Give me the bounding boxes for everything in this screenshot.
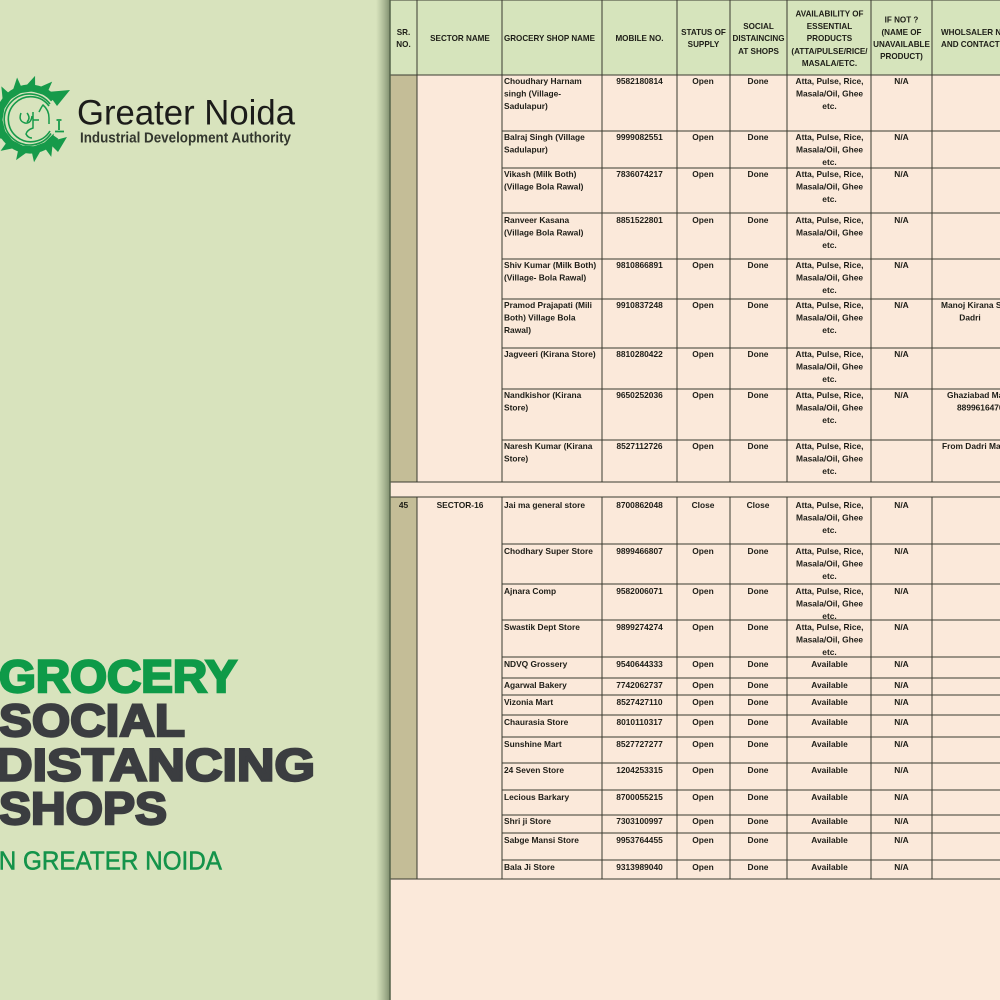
logo wordmark: Greater Noida: [77, 94, 296, 132]
availability column: etc.: [822, 240, 837, 250]
availability column: etc.: [822, 466, 837, 476]
shop names column: Both) Village Bola: [504, 312, 576, 322]
status of supply column: Open: [692, 792, 714, 802]
mobile number column: 8700862048: [616, 500, 663, 510]
heading: distancing: DISTANCING: [0, 740, 315, 790]
logo subtitle: Industrial Development Authority: [80, 130, 291, 146]
shop names column: Nandkishor (Kirana: [504, 390, 582, 400]
social distancing column: Done: [748, 132, 769, 142]
if not column: N/A: [894, 586, 909, 596]
shop names column: (Village Bola Rawal): [504, 228, 584, 238]
shop names column: Agarwal Bakery: [504, 680, 567, 690]
availability column: etc.: [822, 647, 837, 657]
if not column: N/A: [894, 76, 909, 86]
availability column: Available: [811, 659, 848, 669]
shop names column: Balraj Singh (Village: [504, 132, 585, 142]
if not column: N/A: [894, 792, 909, 802]
status of supply column: Open: [692, 862, 714, 872]
table header labels: AT SHOPS: [738, 47, 779, 56]
social distancing column: Done: [748, 169, 769, 179]
availability column: Available: [811, 717, 848, 727]
table header labels: SUPPLY: [688, 40, 720, 49]
table header labels: WHOLSALER N: [941, 28, 1000, 37]
table header labels: MOBILE NO.: [615, 34, 664, 43]
availability column: Masala/Oil, Ghee: [796, 598, 863, 608]
availability column: etc.: [822, 157, 837, 167]
shop names column: Sunshine Mart: [504, 739, 562, 749]
shop names column: Sabge Mansi Store: [504, 835, 579, 845]
if not column: N/A: [894, 132, 909, 142]
sector 16 row labels: [399, 500, 484, 510]
table header labels: SOCIAL: [743, 22, 774, 31]
social distancing column: Done: [748, 659, 769, 669]
if not column: N/A: [894, 300, 909, 310]
mobile number column: 8010110317: [616, 717, 663, 727]
logo: Greater Noida Industrial Development Authority: [0, 76, 296, 162]
icon: saw-blade C emblem: [0, 76, 70, 162]
status of supply column: Open: [692, 835, 714, 845]
mobile number column: 8527727277: [616, 739, 663, 749]
mobile number column: 9313989040: [616, 862, 663, 872]
availability column: Masala/Oil, Ghee: [796, 272, 863, 282]
table header labels: STATUS OF: [681, 28, 726, 37]
if not column: N/A: [894, 765, 909, 775]
availability column: Atta, Pulse, Rice,: [796, 546, 863, 556]
shop names column: Shiv Kumar (Milk Both): [504, 260, 596, 270]
social distancing column: Done: [748, 622, 769, 632]
availability column: Masala/Oil, Ghee: [796, 312, 863, 322]
social distancing column: Close: [747, 500, 770, 510]
shop names column: Store): [504, 402, 528, 412]
mobile number column: 9540644333: [616, 659, 663, 669]
mobile number column: 9582180814: [616, 76, 663, 86]
if not column: N/A: [894, 717, 909, 727]
social distancing column: Done: [748, 717, 769, 727]
panel shadow: [376, 0, 390, 1000]
heading: social: SOCIAL: [0, 695, 185, 746]
availability column: Atta, Pulse, Rice,: [796, 586, 863, 596]
status of supply column: Open: [692, 300, 714, 310]
status of supply column: Open: [692, 132, 714, 142]
sector 16 row labels: 45: [399, 500, 408, 510]
availability column: Masala/Oil, Ghee: [796, 512, 863, 522]
mobile number column: 9910837248: [616, 300, 663, 310]
mobile number column: 7742062737: [616, 680, 663, 690]
social distancing column: Done: [748, 390, 769, 400]
shop names column: 24 Seven Store: [504, 765, 564, 775]
status of supply column: Open: [692, 680, 714, 690]
if not column: N/A: [894, 697, 909, 707]
status of supply column: Open: [692, 349, 714, 359]
mobile number column: 7303100997: [616, 816, 663, 826]
social distancing column: Done: [748, 215, 769, 225]
availability column: Available: [811, 697, 848, 707]
mobile number column: 9953764455: [616, 835, 663, 845]
social distancing column: Done: [748, 680, 769, 690]
availability column: etc.: [822, 571, 837, 581]
table header labels: (NAME OF: [881, 28, 922, 37]
if not column: N/A: [894, 546, 909, 556]
table header labels: DISTAINCING: [732, 34, 785, 43]
if not column: N/A: [894, 622, 909, 632]
social distancing column: Done: [748, 300, 769, 310]
availability column: Masala/Oil, Ghee: [796, 362, 863, 372]
social distancing column: Done: [748, 816, 769, 826]
mobile number column: 9582006071: [616, 586, 663, 596]
social distancing column: Done: [748, 76, 769, 86]
status of supply column: Close: [692, 500, 715, 510]
status of supply column: Open: [692, 169, 714, 179]
mobile number column: 9899274274: [616, 622, 663, 632]
availability column: Masala/Oil, Ghee: [796, 144, 863, 154]
shop names column: Vizonia Mart: [504, 697, 553, 707]
availability column: etc.: [822, 325, 837, 335]
status of supply column: Open: [692, 659, 714, 669]
status of supply column: Open: [692, 390, 714, 400]
shop names column: Vikash (Milk Both): [504, 169, 577, 179]
shop names column: Bala Ji Store: [504, 862, 555, 872]
shop names column: Pramod Prajapati (Mili: [504, 300, 592, 310]
availability column: Atta, Pulse, Rice,: [796, 132, 863, 142]
availability column: etc.: [822, 415, 837, 425]
title block: [0, 651, 315, 876]
availability column: Available: [811, 835, 848, 845]
mobile number column: 9999082551: [616, 132, 663, 142]
if not column: [894, 76, 909, 872]
shop names column: Rawal): [504, 325, 531, 335]
availability column: Atta, Pulse, Rice,: [796, 76, 863, 86]
shop names column: Ajnara Comp: [504, 586, 556, 596]
shop names column: (Village Bola Rawal): [504, 182, 584, 192]
shop names column: singh (Village-: [504, 88, 561, 98]
availability column: Atta, Pulse, Rice,: [796, 622, 863, 632]
table header labels: NO.: [396, 40, 411, 49]
mobile number column: 8851522801: [616, 215, 663, 225]
serial number column fill, second block: [390, 497, 417, 879]
if not column: N/A: [894, 390, 909, 400]
availability column: Masala/Oil, Ghee: [796, 634, 863, 644]
availability column: Available: [811, 792, 848, 802]
availability column: etc.: [822, 374, 837, 384]
availability column: Atta, Pulse, Rice,: [796, 215, 863, 225]
availability column: Atta, Pulse, Rice,: [796, 349, 863, 359]
table header labels: SECTOR NAME: [430, 34, 490, 43]
table header labels: PRODUCT): [880, 52, 923, 61]
mobile number column: 8527427110: [616, 697, 663, 707]
availability column: Masala/Oil, Ghee: [796, 558, 863, 568]
shop names column: Sadulapur): [504, 101, 548, 111]
availability column: Available: [811, 816, 848, 826]
table header labels: MASALA/ETC.: [802, 59, 857, 68]
social distancing column: Done: [748, 349, 769, 359]
social distancing column: Done: [748, 765, 769, 775]
social distancing column: Done: [748, 260, 769, 270]
panel: spreadsheet table: [390, 0, 1000, 1000]
table header labels: UNAVAILABLE: [873, 40, 930, 49]
mobile number column: 7836074217: [616, 169, 663, 179]
availability column: Atta, Pulse, Rice,: [796, 390, 863, 400]
availability column: Masala/Oil, Ghee: [796, 454, 863, 464]
table header labels: GROCERY SHOP NAME: [504, 34, 596, 43]
if not column: N/A: [894, 500, 909, 510]
if not column: N/A: [894, 215, 909, 225]
shop names column: Chaurasia Store: [504, 717, 569, 727]
social distancing column: Done: [748, 441, 769, 451]
shop names column: Sadulapur): [504, 144, 548, 154]
serial number column fill: [390, 75, 417, 482]
table header labels: PRODUCTS: [807, 34, 853, 43]
availability column: Available: [811, 739, 848, 749]
status of supply column: Open: [692, 586, 714, 596]
wholesaler column: Dadri: [959, 312, 981, 322]
status of supply column: [692, 76, 715, 872]
mobile number column: 8810280422: [616, 349, 663, 359]
status of supply column: Open: [692, 441, 714, 451]
mobile number column: 8527112726: [616, 441, 663, 451]
shop names column: Store): [504, 454, 528, 464]
shop names column: NDVQ Grossery: [504, 659, 568, 669]
mobile number column: 1204253315: [616, 765, 663, 775]
if not column: N/A: [894, 862, 909, 872]
status of supply column: Open: [692, 622, 714, 632]
status of supply column: Open: [692, 739, 714, 749]
table header background: [390, 0, 1000, 75]
availability column: [796, 76, 863, 872]
availability column: Masala/Oil, Ghee: [796, 228, 863, 238]
status of supply column: Open: [692, 215, 714, 225]
mobile number column: 9899466807: [616, 546, 663, 556]
availability column: Available: [811, 862, 848, 872]
availability column: etc.: [822, 611, 837, 621]
shop names column: Choudhary Harnam: [504, 76, 582, 86]
status of supply column: Open: [692, 717, 714, 727]
table header labels: AVAILABILITY OF: [796, 10, 863, 18]
status of supply column: Open: [692, 76, 714, 86]
if not column: N/A: [894, 349, 909, 359]
table header labels: ESSENTIAL: [807, 22, 852, 31]
availability column: etc.: [822, 101, 837, 111]
if not column: N/A: [894, 835, 909, 845]
table header labels: IF NOT ?: [885, 16, 918, 24]
if not column: N/A: [894, 659, 909, 669]
shop names column: [504, 76, 596, 872]
if not column: N/A: [894, 680, 909, 690]
availability column: Available: [811, 765, 848, 775]
social distancing column: Done: [748, 862, 769, 872]
table header labels: AND CONTACT: [941, 40, 1000, 49]
shop names column: Ranveer Kasana: [504, 215, 570, 225]
if not column: N/A: [894, 739, 909, 749]
if not column: N/A: [894, 816, 909, 826]
status of supply column: Open: [692, 697, 714, 707]
social distancing column: Done: [748, 697, 769, 707]
if not column: N/A: [894, 169, 909, 179]
availability column: Atta, Pulse, Rice,: [796, 441, 863, 451]
status of supply column: Open: [692, 546, 714, 556]
sector 16 row labels: SECTOR-16: [437, 500, 484, 510]
shop names column: Swastik Dept Store: [504, 622, 580, 632]
if not column: N/A: [894, 260, 909, 270]
availability column: Masala/Oil, Ghee: [796, 88, 863, 98]
status of supply column: Open: [692, 816, 714, 826]
heading: grocery: GROCERY: [0, 651, 237, 702]
availability column: Atta, Pulse, Rice,: [796, 260, 863, 270]
shop names column: Jai ma general store: [504, 500, 585, 510]
shop names column: (Village- Bola Rawal): [504, 272, 586, 282]
availability column: Atta, Pulse, Rice,: [796, 169, 863, 179]
social distancing column: Done: [748, 546, 769, 556]
table grid lines: [390, 0, 1000, 1000]
availability column: Available: [811, 680, 848, 690]
availability column: Masala/Oil, Ghee: [796, 182, 863, 192]
availability column: Masala/Oil, Ghee: [796, 402, 863, 412]
social distancing column: [747, 76, 770, 872]
social distancing column: Done: [748, 792, 769, 802]
mobile number column: [616, 76, 663, 872]
shop names column: Naresh Kumar (Kirana: [504, 441, 593, 451]
availability column: etc.: [822, 525, 837, 535]
availability column: Atta, Pulse, Rice,: [796, 500, 863, 510]
table header labels: SR.: [397, 28, 410, 37]
status of supply column: Open: [692, 260, 714, 270]
availability column: Atta, Pulse, Rice,: [796, 300, 863, 310]
availability column: etc.: [822, 285, 837, 295]
status of supply column: Open: [692, 765, 714, 775]
mobile number column: 8700055215: [616, 792, 663, 802]
table header labels: (ATTA/PULSE/RICE/: [791, 47, 868, 56]
shop names column: Chodhary Super Store: [504, 546, 593, 556]
shop names column: Jagveeri (Kirana Store): [504, 349, 596, 359]
social distancing column: Done: [748, 739, 769, 749]
mobile number column: 9810866891: [616, 260, 663, 270]
heading: shops: SHOPS: [0, 783, 167, 834]
availability column: etc.: [822, 194, 837, 204]
shop names column: Lecious Barkary: [504, 792, 570, 802]
table header labels: [396, 10, 1000, 68]
wholesaler column: [941, 300, 1000, 451]
mobile number column: 9650252036: [616, 390, 663, 400]
social distancing column: Done: [748, 586, 769, 596]
social distancing column: Done: [748, 835, 769, 845]
shop names column: Shri ji Store: [504, 816, 551, 826]
